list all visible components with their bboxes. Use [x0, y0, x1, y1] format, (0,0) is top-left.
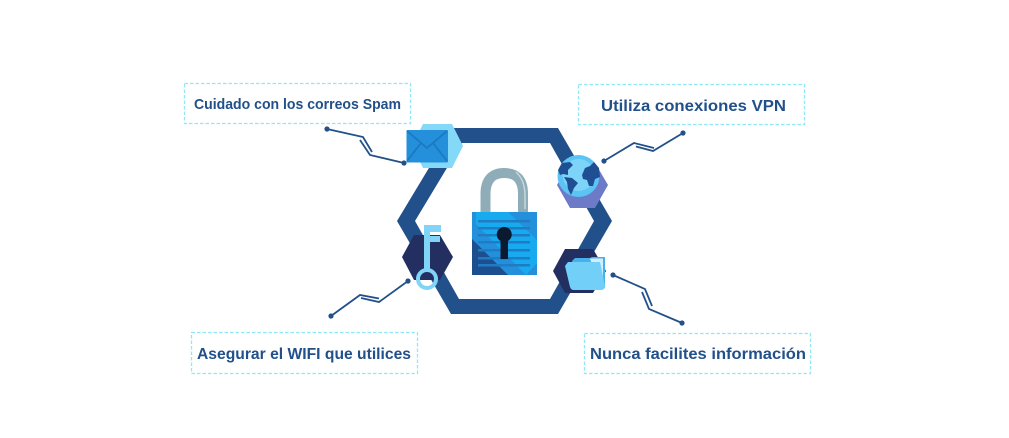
- keyhole: [497, 227, 512, 259]
- callout: VPN: [578, 84, 804, 124]
- shackle: [486, 173, 523, 213]
- callout: WIFI: Asegurar el WIFI que utilices: [197, 346, 411, 363]
- connector: spam: [324, 126, 407, 166]
- hexagon frame: [397, 128, 612, 314]
- icon: padlock: [472, 172, 537, 275]
- callout: correos spam: Cuidado con los correos Spam: [194, 97, 401, 113]
- callout: WIFI: [192, 332, 418, 374]
- callout: correos spam: [184, 84, 410, 124]
- icon: folder: [553, 249, 606, 293]
- callout: informacion: Nunca facilites información: [590, 346, 806, 363]
- slats: [478, 220, 530, 266]
- lock body: [472, 212, 537, 275]
- icon: envelope: [406, 124, 463, 168]
- icon: key: [402, 225, 453, 288]
- callout: VPN: Utiliza conexiones VPN: [601, 98, 786, 115]
- connector: informacion: [610, 272, 685, 326]
- icon: globe: [557, 155, 608, 208]
- connector: VPN: [601, 130, 686, 164]
- connector: WIFI: [328, 278, 411, 319]
- callout: informacion: [584, 334, 810, 374]
